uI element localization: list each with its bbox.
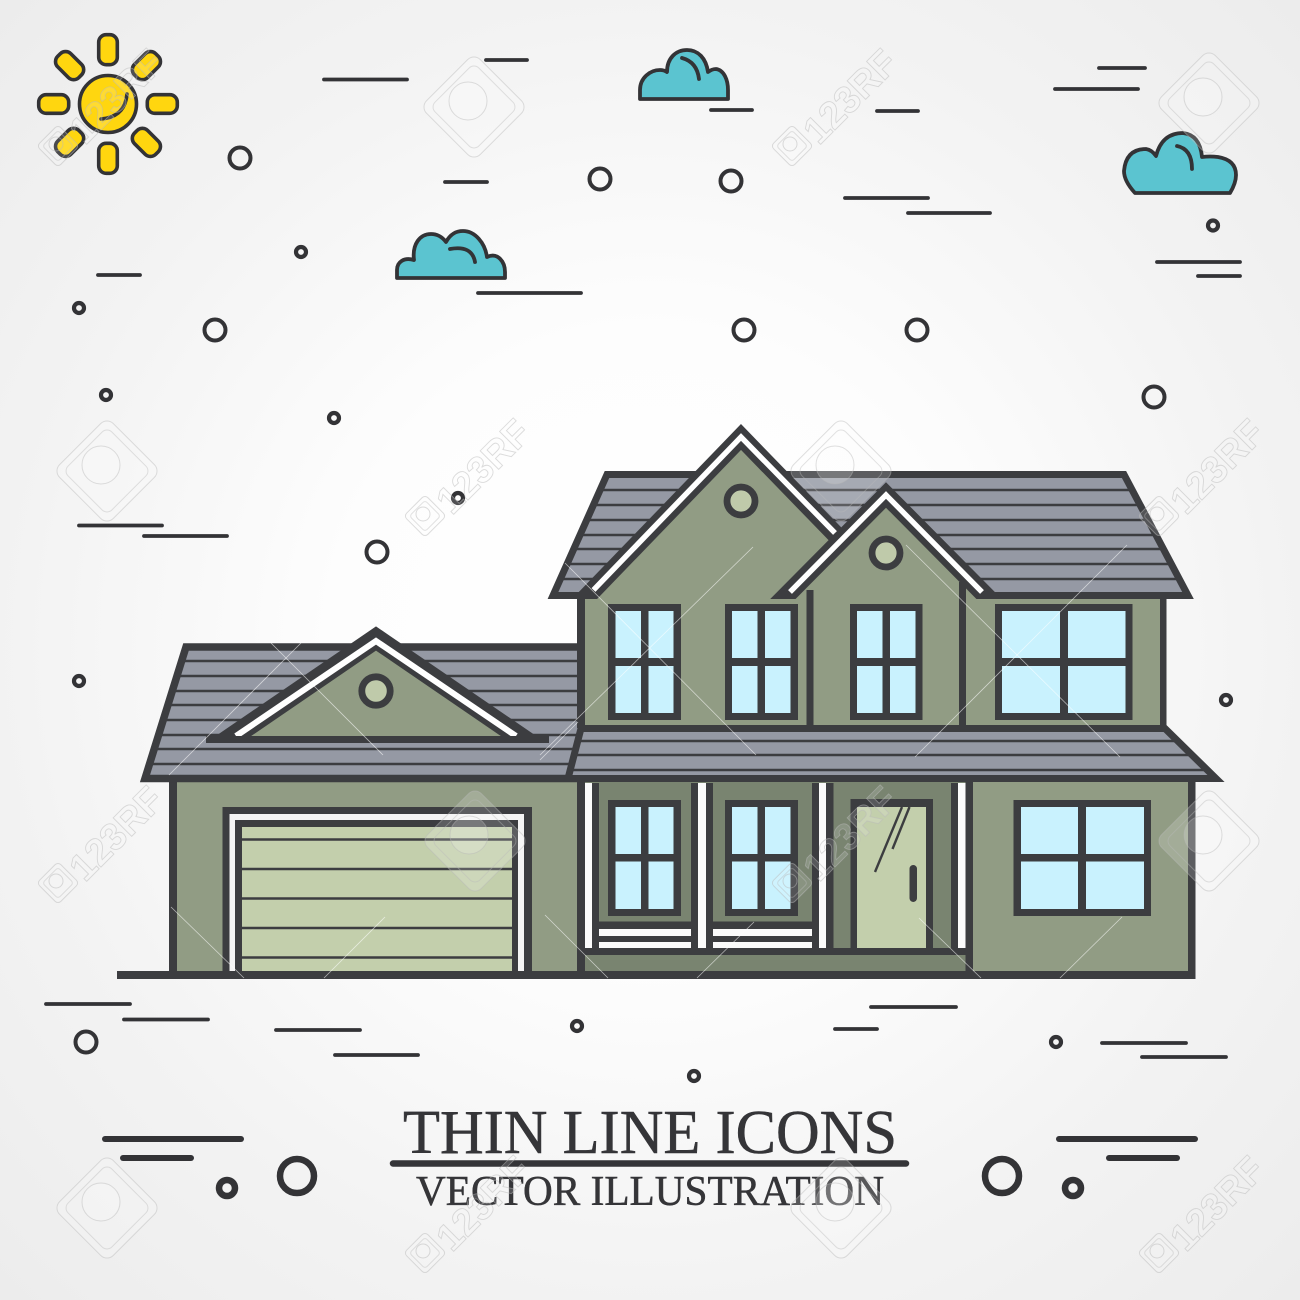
watermark overlay: 123RF [62, 42, 172, 152]
window lower 2 [725, 800, 798, 916]
icon: sun [39, 35, 177, 173]
window upper 2 [725, 604, 798, 720]
watermark overlay: 123RF [62, 779, 172, 889]
icon: cloud top centre [640, 50, 728, 99]
decorative rings [74, 148, 1231, 1196]
garage wall [173, 778, 581, 975]
upper main roof [540, 474, 1200, 596]
window lower right [1014, 800, 1151, 916]
decorative thick dashes [105, 1139, 1195, 1158]
front door [850, 799, 933, 948]
watermark overlay: 123RF [429, 1149, 539, 1259]
porch columns [585, 783, 966, 948]
watermark overlay: 123RF [1163, 412, 1273, 522]
garage gable [206, 638, 549, 750]
porch roof [560, 728, 1225, 778]
porch floor line [577, 948, 973, 955]
garage roof [140, 647, 590, 778]
ground line [117, 971, 1196, 979]
watermark overlay: 123RF [1163, 1149, 1273, 1259]
watermark overlay: 123RF [796, 779, 906, 889]
upper wall outlines [577, 582, 1166, 728]
title: THIN LINE ICONS [403, 1099, 897, 1167]
watermark overlay: 123RF [796, 42, 906, 152]
window upper 3 [850, 604, 922, 720]
small gable [770, 495, 1002, 612]
window upper 4 [995, 604, 1132, 720]
house illustration [117, 437, 1225, 979]
window lower 1 [608, 800, 681, 916]
title [393, 1099, 906, 1215]
watermark overlay: 123RF [429, 412, 539, 522]
main gable [579, 424, 842, 599]
window upper 1 [608, 604, 681, 720]
decorative dashes [46, 60, 1240, 1057]
title: VECTOR ILLUSTRATION [416, 1169, 884, 1215]
icon: cloud lower left [397, 231, 505, 278]
upper wall [581, 599, 1163, 728]
ground floor walls [577, 782, 1196, 975]
porch steps [599, 922, 812, 948]
icon: cloud top right [1124, 133, 1236, 193]
garage door [222, 807, 532, 975]
